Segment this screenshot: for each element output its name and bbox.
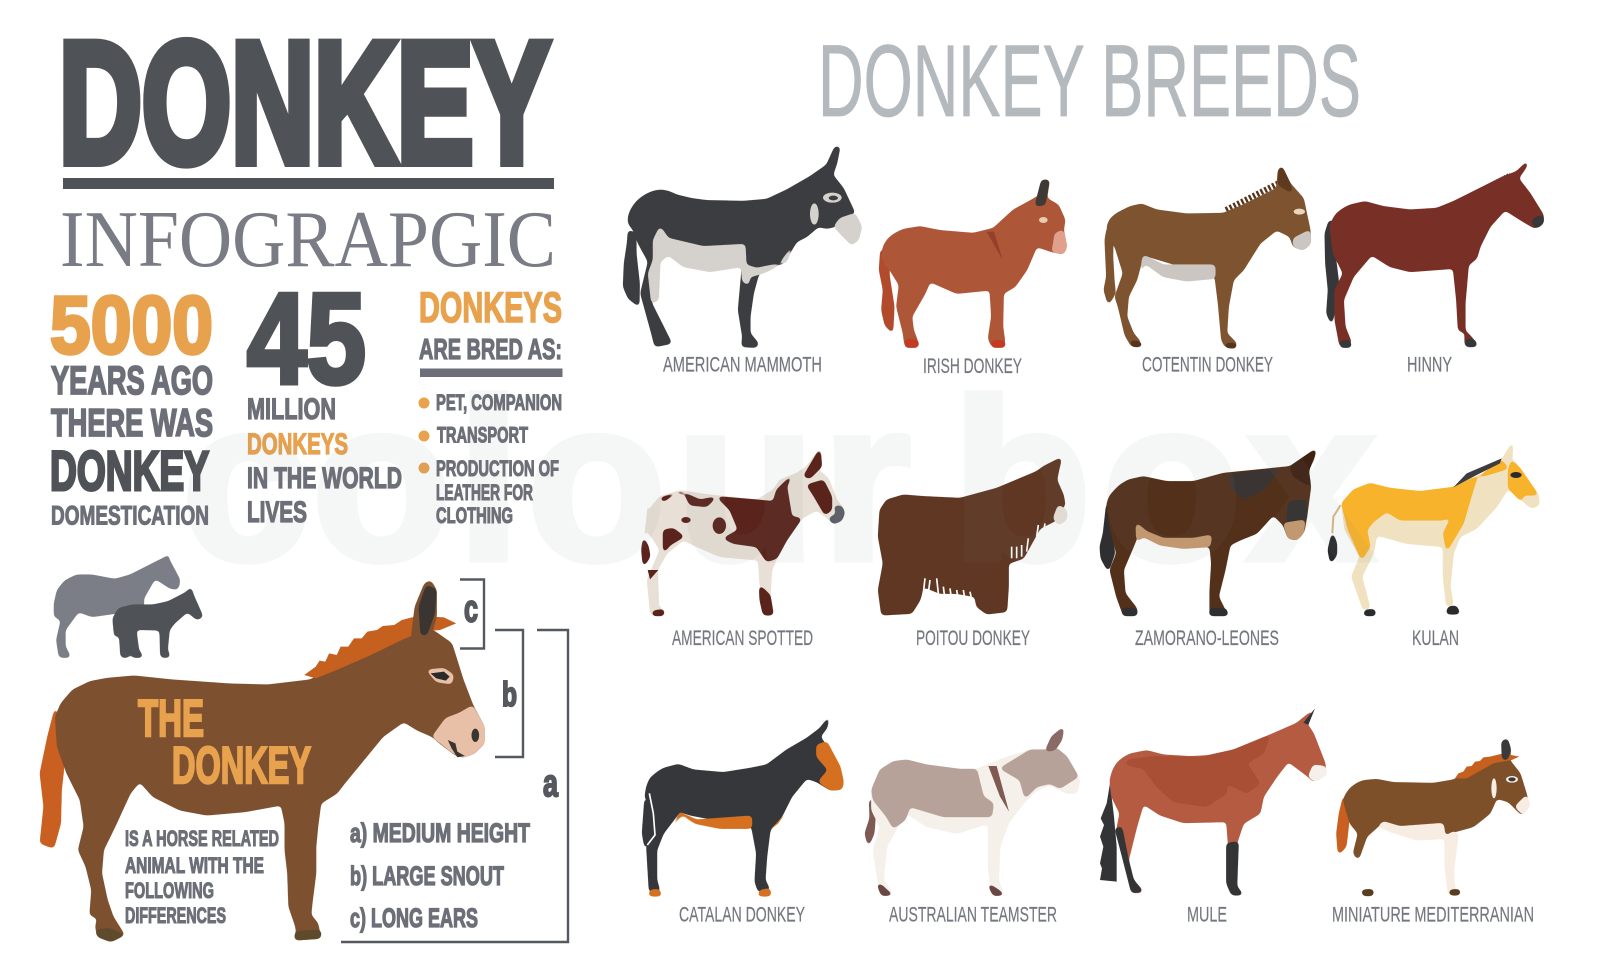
breed: Catalan Donkey (642, 715, 843, 896)
text block: 5000 years ago: DOMESTICATION (51, 500, 209, 530)
breed: Miniature Mediterranian (1337, 738, 1530, 896)
text block: donkeys are bred as: CLOTHING (436, 503, 513, 528)
label: Cotentin Donkey: COTENTIN DONKEY (1142, 354, 1273, 376)
breed: American Mammoth (623, 147, 862, 347)
text block: donkeys are bred as: ARE BRED AS: (419, 334, 562, 366)
text block: 45 million donkeys (247, 267, 402, 529)
text block: 45 million donkeys: DONKEYS (247, 428, 348, 461)
text block: description (125, 826, 279, 928)
label: Mule: MULE (1187, 904, 1227, 926)
text block: 5000 years ago: 5000 (50, 280, 213, 371)
breed: Mule (1100, 708, 1326, 895)
bracket letters: c (464, 588, 478, 630)
breed: American Spotted (642, 448, 845, 616)
text block: differences list: b) LARGE SNOUT (350, 861, 504, 891)
text block: 5000 years ago: THERE WAS (51, 402, 213, 445)
label: Poitou Donkey: POITOU DONKEY (916, 627, 1030, 650)
title: DONKEY: DONKEY (59, 7, 550, 199)
watermark: colourbox: colourbox (182, 354, 1375, 608)
bracket letters (464, 588, 559, 805)
text block: 5000 years ago: DONKEY (50, 439, 209, 502)
text block: differences list: c) LONG EARS (350, 903, 478, 933)
breed: Hinny (1325, 160, 1543, 347)
text block: donkeys are bred as (418, 284, 562, 528)
text block: donkeys are bred as: TRANSPORT (437, 422, 528, 448)
text block: differences list (350, 818, 530, 933)
subtitle: INFOGRAPGIC: INFOGRAPGIC (60, 194, 556, 284)
text block: description: FOLLOWING (125, 878, 214, 903)
icon: small donkey silhouettes (54, 551, 203, 657)
breed: Australian Teamster (865, 727, 1080, 896)
bracket letters: b (502, 676, 517, 714)
label: American Mammoth: AMERICAN MAMMOTH (663, 354, 822, 376)
main donkey heading: THE DONKEY (138, 690, 311, 795)
label: Zamorano-Leones: ZAMORANO-LEONES (1135, 627, 1279, 650)
measurement brackets (341, 580, 568, 942)
breed: Irish Donkey (879, 180, 1067, 347)
breed: Kulan (1328, 440, 1539, 616)
main donkey heading: THE DONKEY: DONKEY (172, 737, 311, 795)
text block: differences list: a) MEDIUM HEIGHT (350, 818, 530, 848)
text block: donkeys are bred as: PET, COMPANION (436, 390, 562, 415)
bracket letters: a (543, 763, 559, 805)
title underline bar (63, 178, 554, 189)
text block: description: IS A HORSE RELATED (125, 826, 279, 851)
text block: donkeys are bred as: LEATHER FOR (436, 480, 533, 505)
text block: 45 million donkeys: IN THE WORLD (247, 462, 402, 495)
text block: 45 million donkeys: 45 (247, 267, 366, 411)
breed: Zamorano-Leones (1100, 448, 1317, 616)
breed: Poitou Donkey (878, 457, 1067, 615)
text block: description: ANIMAL WITH THE (125, 853, 264, 878)
label: Kulan: KULAN (1412, 627, 1459, 650)
text block: description: DIFFERENCES (125, 903, 226, 928)
text block: donkeys are bred as: PRODUCTION OF (436, 456, 559, 481)
text block: 45 million donkeys: LIVES (247, 496, 307, 529)
text block: donkeys are bred as: DONKEYS (419, 284, 562, 332)
label: American Spotted: AMERICAN SPOTTED (672, 627, 813, 650)
text block: 5000 years ago: YEARS AGO (51, 359, 213, 403)
label: Catalan Donkey: CATALAN DONKEY (679, 904, 805, 926)
illustration: main donkey (40, 581, 484, 942)
breed: Cotentin Donkey (1104, 166, 1311, 348)
text block: 45 million donkeys: MILLION (247, 393, 336, 426)
text block: 5000 years ago (50, 280, 213, 530)
label: Australian Teamster: AUSTRALIAN TEAMSTER (889, 904, 1057, 926)
label: Hinny: HINNY (1407, 354, 1452, 376)
main donkey heading: THE DONKEY: THE (138, 690, 204, 748)
label: Irish Donkey: IRISH DONKEY (923, 355, 1022, 378)
